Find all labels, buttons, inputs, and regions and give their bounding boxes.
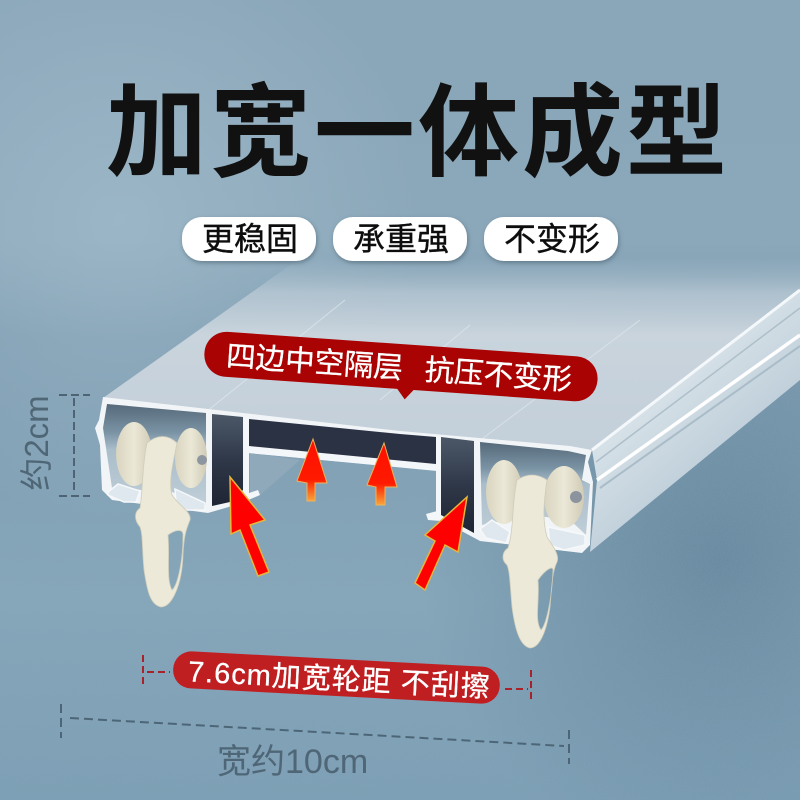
callout: hollow layers: 四边中空隔层 bbox=[225, 340, 404, 385]
right hollow chamber bbox=[480, 442, 590, 535]
callout: hollow layers bbox=[202, 330, 599, 413]
badge: 不变形: 不变形 bbox=[504, 221, 600, 257]
front profile frame bbox=[95, 397, 593, 553]
centre hollow core bbox=[249, 419, 436, 464]
left hollow core bbox=[212, 414, 243, 506]
title: 加宽一体成型 bbox=[106, 78, 730, 190]
arrow: big right bbox=[415, 497, 467, 590]
inner channel shadow bbox=[250, 453, 300, 495]
left rollers bbox=[116, 422, 207, 488]
right rollers bbox=[486, 460, 584, 528]
badge: 更稳固 bbox=[182, 217, 316, 261]
dimension: 约2cm: 约2cm bbox=[18, 395, 55, 491]
curtain rail body bbox=[95, 258, 800, 553]
rail seams bbox=[206, 300, 640, 442]
dimension: 约2cm bbox=[18, 395, 90, 496]
right roller and hook bbox=[486, 460, 584, 648]
left hollow chamber bbox=[103, 404, 206, 505]
callout: hollow layers: 抗压不变形 bbox=[424, 354, 573, 397]
badge: 承重强 bbox=[333, 217, 467, 261]
badge: 不变形 bbox=[484, 217, 618, 261]
left runner lips bbox=[108, 484, 205, 510]
dimension: 宽约10cm: 宽约10cm bbox=[217, 743, 368, 781]
rail side grooves bbox=[592, 290, 800, 488]
rail side face bbox=[590, 290, 800, 552]
centre white bars bbox=[228, 417, 441, 521]
callout: wheelbase: 7.6cm加宽轮距 不刮擦 bbox=[187, 655, 492, 704]
right hook bbox=[503, 475, 558, 648]
badge: 更稳固: 更稳固 bbox=[202, 221, 298, 257]
badge: 承重强: 承重强 bbox=[353, 221, 449, 257]
dimension: 7.6cm wheelbase dashes bbox=[143, 655, 531, 702]
arrow: small centre left bbox=[297, 439, 327, 501]
arrow: big left bbox=[230, 477, 269, 576]
right hollow core bbox=[441, 437, 474, 533]
right runner lips bbox=[480, 520, 585, 550]
dimension: 宽约10cm bbox=[61, 704, 569, 781]
left hook bbox=[136, 436, 190, 607]
rail top face bbox=[103, 258, 800, 450]
left roller and hook bbox=[116, 422, 207, 607]
arrow: small centre right bbox=[367, 443, 397, 505]
